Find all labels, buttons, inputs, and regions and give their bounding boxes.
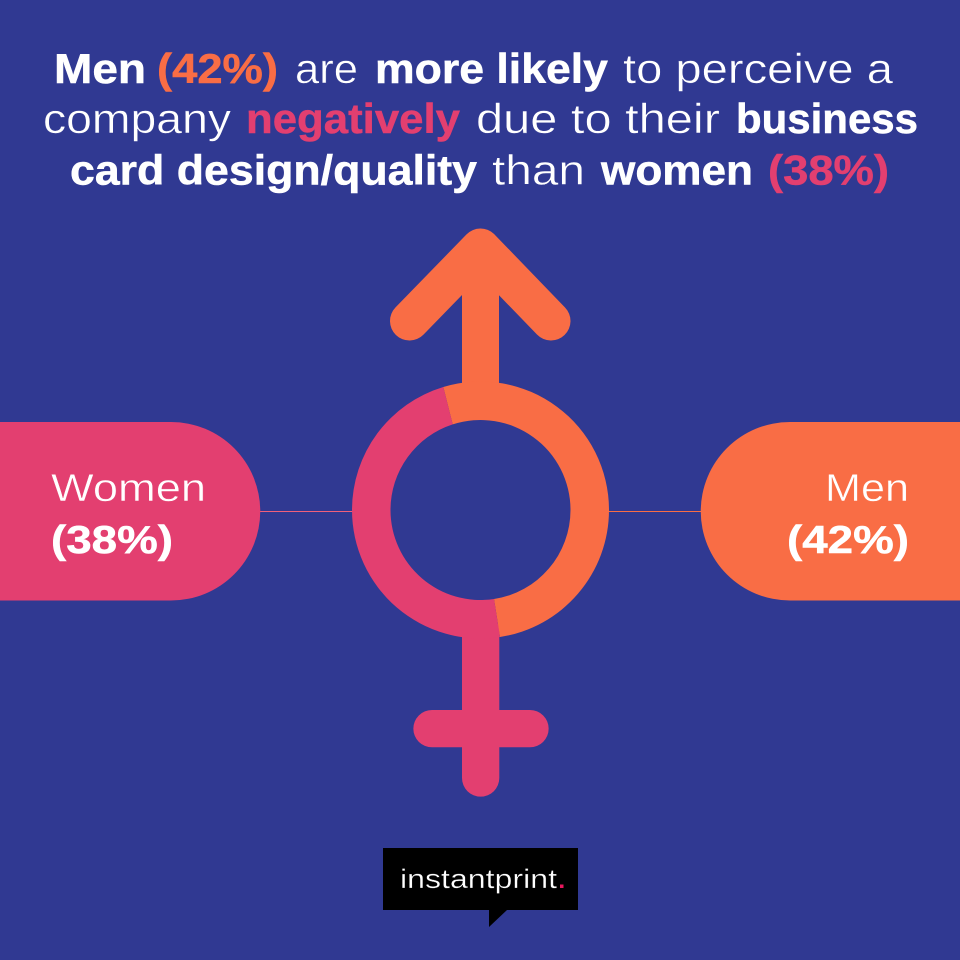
title: card design/quality (70, 146, 478, 194)
title: than (492, 146, 585, 194)
connector line: men (606, 511, 703, 512)
title (43, 45, 918, 194)
title: women (600, 146, 753, 194)
male arrow (410, 248, 551, 400)
title: (38%) (768, 146, 889, 194)
connector line: women (258, 511, 354, 512)
title: company (43, 95, 231, 142)
title: are (295, 45, 358, 92)
title: more likely (375, 45, 609, 92)
ring: men segment (443, 381, 609, 637)
panel: men label (701, 422, 960, 600)
panel: women label: Women (51, 467, 206, 510)
title: Men (54, 45, 146, 92)
logo: instantprint: instantprint (400, 864, 558, 894)
panel: men label: (42%) (787, 519, 909, 562)
title: (42%) (157, 45, 278, 92)
panel: men label: Men (825, 467, 909, 510)
ring: women segment (352, 387, 500, 638)
title: to perceive a (623, 45, 894, 92)
female cross (413, 625, 549, 797)
title: due to their (476, 95, 720, 142)
title: business (736, 95, 918, 142)
logo: instantprint (383, 848, 578, 927)
panel: women label: (38%) (51, 519, 173, 562)
title: negatively (246, 95, 461, 142)
icon: gender symbol (352, 248, 609, 797)
panel: women label (0, 422, 260, 600)
